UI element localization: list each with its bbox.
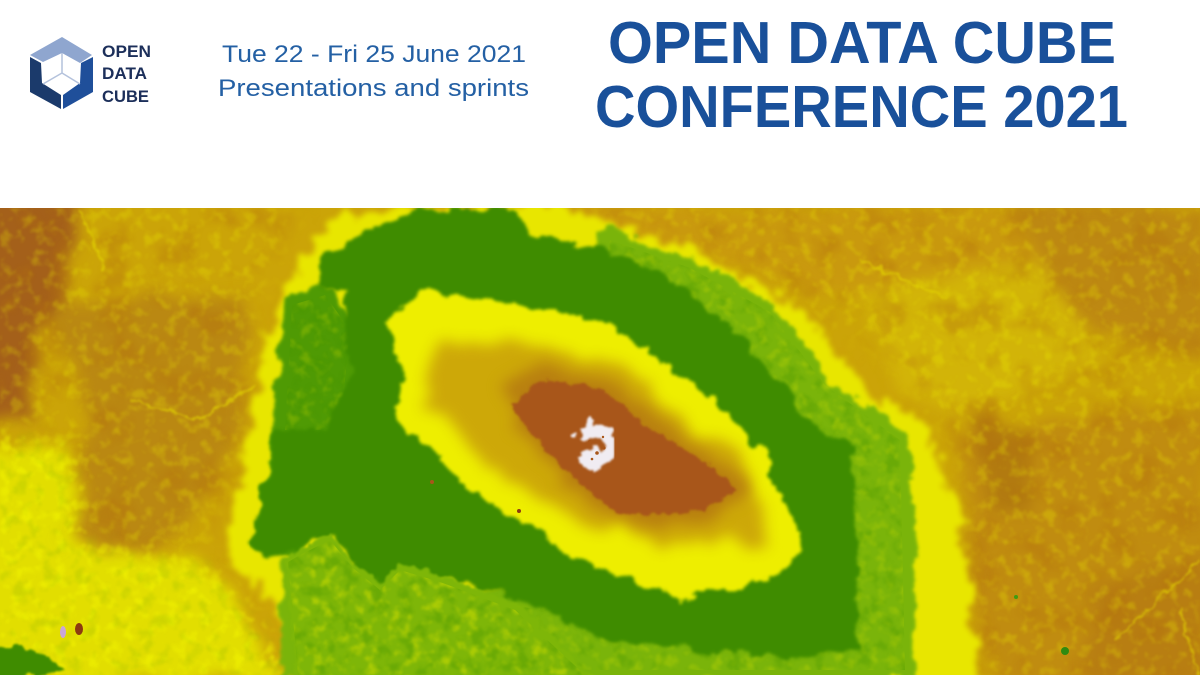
yellow lowland speckle bbox=[0, 428, 282, 674]
map base terrain bbox=[0, 208, 1200, 675]
golden inner zone bbox=[425, 335, 775, 552]
event dates and format bbox=[218, 41, 529, 102]
logo wordmark: OPEN bbox=[102, 43, 151, 61]
lower-left light green patch bbox=[285, 533, 590, 675]
lower-left patch yellow flecks bbox=[288, 544, 582, 675]
light yellow drainage veins bbox=[80, 210, 1200, 675]
title: OPEN DATA CUBE bbox=[608, 10, 1116, 76]
event dates and format: Tue 22 - Fri 25 June 2021 bbox=[222, 41, 526, 68]
belt yellow flecks bbox=[285, 245, 905, 670]
title: CONFERENCE 2021 bbox=[595, 74, 1128, 140]
logo: Open Data Cube bbox=[30, 37, 151, 109]
lower-left patch green flecks bbox=[288, 544, 582, 675]
ochre crater rim bbox=[495, 365, 755, 525]
terrain tones bbox=[0, 190, 1200, 675]
event dates and format: Presentations and sprints bbox=[218, 75, 529, 102]
dark green ring bbox=[253, 208, 858, 658]
gold terrain speckle bbox=[0, 208, 1200, 675]
right mid-green belt bbox=[280, 228, 916, 675]
logo wordmark bbox=[102, 43, 151, 106]
small surface spots bbox=[60, 480, 1069, 655]
yellow inner plateau bbox=[387, 288, 806, 600]
title bbox=[595, 10, 1128, 140]
satellite vegetation map bbox=[0, 208, 1200, 675]
icon: summit snow cap bbox=[573, 419, 611, 472]
header band bbox=[30, 10, 1128, 140]
logo wordmark: DATA bbox=[102, 65, 147, 83]
bright yellow halo around green ring bbox=[222, 205, 978, 675]
green belt speckle bbox=[524, 244, 905, 670]
left mid-green mottled flank bbox=[255, 285, 360, 560]
dark green lowland corner bbox=[0, 645, 65, 675]
logo wordmark: CUBE bbox=[102, 88, 149, 106]
icon: cube bbox=[30, 37, 93, 109]
brown crater bbox=[512, 380, 738, 516]
snow cap melt spots bbox=[588, 436, 606, 460]
